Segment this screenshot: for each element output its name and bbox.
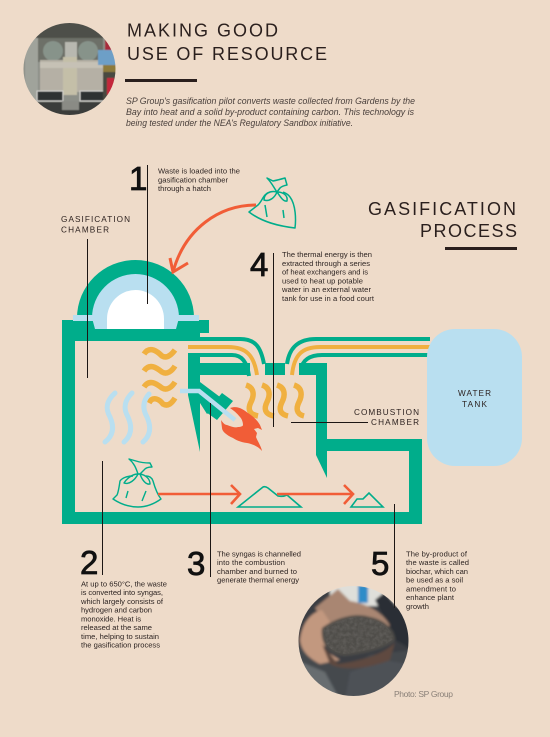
step 4: of heat exchangers and is: [282, 268, 368, 276]
water tank: WATER: [458, 389, 491, 398]
step 2: time, helping to sustain: [81, 632, 159, 641]
label: gasification chamber: CHAMBER: [61, 226, 109, 234]
step 3: chamber and burned to: [217, 567, 297, 576]
title: MAKING GOOD: [127, 20, 278, 40]
combustion chamber roof: [200, 363, 285, 375]
step 2: monoxide. Heat is: [81, 614, 141, 624]
step 4: [250, 246, 375, 303]
title: [127, 20, 327, 64]
label: combustion chamber: CHAMBER: [371, 418, 419, 427]
icon: waste bag bottom: [113, 459, 161, 507]
step 2: At up to 650°C, the waste: [81, 580, 167, 588]
arrow: loading waste: [170, 205, 256, 272]
outer and inner green pipes: [198, 339, 430, 376]
step 2: released at the same: [81, 623, 152, 632]
step 5: 5: [371, 545, 389, 582]
callout lines: [88, 165, 394, 608]
section heading rule: [445, 247, 517, 250]
step 2: which largely consists of: [80, 597, 164, 606]
ash pile 1: [238, 487, 301, 507]
step 5: The by-product of: [406, 550, 468, 558]
step 5: the waste is called: [406, 558, 469, 567]
yellow heat waves: gasification chamber: [144, 350, 175, 405]
step 2: hydrogen and carbon: [81, 606, 152, 614]
intro text: [126, 96, 415, 128]
step 3: [187, 545, 301, 584]
yellow heat waves: combustion chamber: [246, 385, 304, 416]
step 2: is converted into syngas,: [81, 588, 163, 597]
section heading: gasification process: PROCESS: [420, 221, 517, 241]
flame: [221, 407, 262, 451]
icon: waste bag top: [249, 178, 295, 228]
intro text: being tested under the NEA's Regulatory Sandbox initiative.: [126, 118, 353, 128]
step 5: biochar, which can: [406, 567, 468, 576]
step 1: through a hatch: [158, 184, 211, 193]
water tank: [427, 329, 522, 466]
dome hatch: [73, 260, 199, 329]
step 5: [371, 545, 469, 611]
step 4: 4: [250, 246, 268, 283]
step 4: water in an external water: [281, 285, 371, 294]
step 3: into the combustion: [217, 558, 285, 567]
step 1: gasification chamber: [158, 176, 228, 184]
yellow heat-exchange pipe: [188, 347, 430, 375]
diagram: gasifier structure: [62, 320, 430, 524]
step 4: tank for use in a food court: [282, 294, 375, 303]
step 3: The syngas is channelled: [217, 550, 301, 558]
step 2: [80, 544, 167, 650]
step 4: used to heat up potable: [282, 276, 363, 286]
label: combustion chamber: [354, 408, 419, 427]
step 1: [129, 160, 240, 197]
title rule: [125, 79, 197, 82]
step 4: The thermal energy is then: [282, 250, 372, 259]
intro text: Bay into heat and a solid by-product containing carbon. This technology is: [126, 107, 414, 117]
photo: biochar in hands: [298, 586, 408, 696]
label: gasification chamber: [61, 215, 130, 234]
step 4: extracted through a series: [282, 259, 370, 268]
photo: gasification unit: [24, 23, 116, 115]
step 5: amendment to: [406, 584, 456, 594]
step 2: the gasification process: [81, 640, 160, 650]
step 3: 3: [187, 545, 205, 582]
step 1: Waste is loaded into the: [158, 166, 240, 176]
step 2: 2: [80, 544, 98, 581]
section heading: gasification process: GASIFICATION: [368, 199, 516, 219]
step 1: 1: [129, 160, 147, 197]
step 5: enhance plant: [406, 593, 455, 602]
combustion chamber wall: [299, 363, 422, 478]
water tank: TANK: [462, 400, 488, 409]
step 5: growth: [406, 602, 429, 611]
syngas pipe: [180, 391, 235, 420]
intro text: SP Group's gasification pilot converts waste collected from Gardens by the: [126, 96, 415, 106]
nozzle block: [206, 393, 233, 420]
label: combustion chamber: COMBUSTION: [354, 408, 419, 417]
step 5: be used as a soil: [406, 576, 463, 584]
ash pile 2: [351, 493, 383, 507]
outer shell walls: [62, 320, 422, 524]
title: USE OF RESOURCE: [127, 44, 327, 64]
arrow: waste to biochar 2: [277, 485, 353, 504]
label: gasification chamber: GASIFICATION: [61, 215, 130, 224]
blue syngas waves: [105, 393, 150, 442]
divider wall and nozzle base: [188, 353, 224, 452]
photo credit: Photo: SP Group: [394, 689, 453, 699]
step 3: generate thermal energy: [217, 576, 299, 584]
section heading: gasification process: [368, 199, 517, 241]
arrow: waste to biochar 1: [158, 485, 240, 504]
